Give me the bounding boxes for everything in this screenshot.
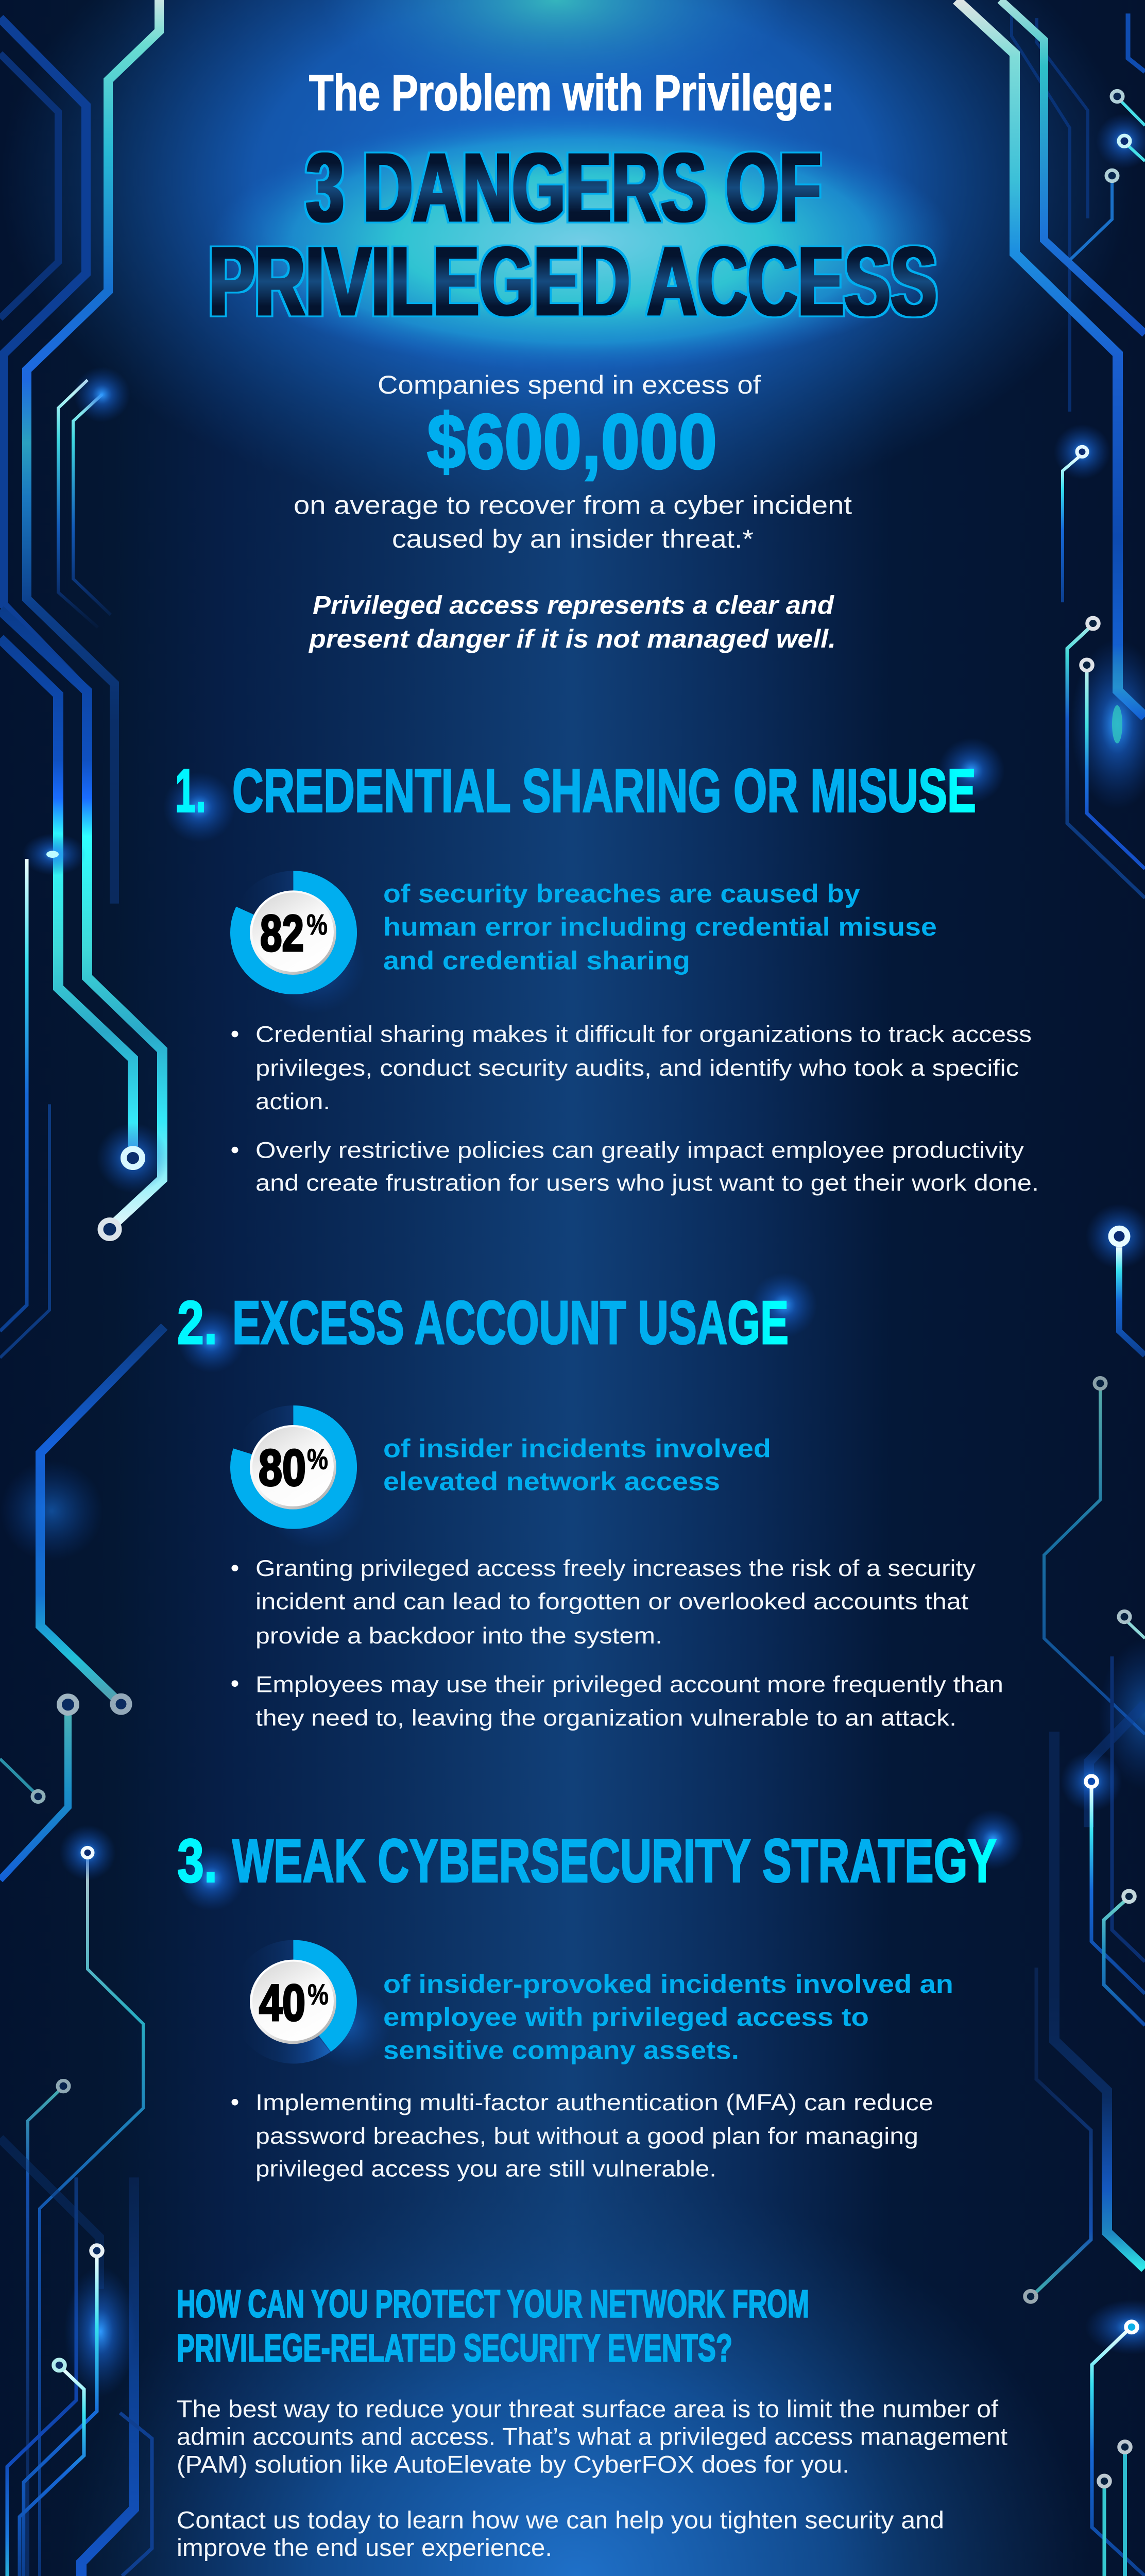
cost figure: $600,000 (427, 398, 717, 485)
closing paragraph: admin accounts and access. That’s what a privileged access management (177, 2423, 1008, 2451)
donut chart: 40%: 40 (259, 1975, 305, 2031)
section 3: weak cybersecurity strategy (177, 1809, 1024, 2181)
stat text: 40%: of insider-provoked incidents involved an (383, 1969, 953, 1998)
section 2 bullets: they need to, leaving the organization vulnerable to an attack. (255, 1705, 956, 1731)
intro text with cost figure: on average to recover from a cyber incident (294, 490, 852, 520)
intro text with cost figure: Companies spend in excess of (378, 370, 761, 399)
section 2: excess account usage (177, 1273, 1003, 1731)
stat text: 80%: elevated network access (383, 1467, 720, 1496)
closing heading: PRIVILEGE-RELATED SECURITY EVENTS? (177, 2327, 732, 2370)
section 1 heading: 1. (175, 756, 206, 825)
donut chart: 82%: 82 (260, 905, 304, 962)
call to action: Contact us today to learn how we can help you tighten security and (177, 2506, 944, 2534)
section 2 heading: 2. (177, 1289, 217, 1357)
section 1 bullets: and create frustration for users who just want to get their work done. (255, 1170, 1039, 1196)
call to action: improve the end user experience. (177, 2534, 552, 2562)
call to action (177, 2506, 944, 2562)
stat text: 80% (383, 1434, 771, 1496)
section 2 bullets: provide a backdoor into the system. (255, 1622, 662, 1649)
main headline (209, 133, 937, 336)
section 1: credential sharing or misuse (163, 738, 1039, 1196)
stat text: 80%: of insider incidents involved (383, 1434, 771, 1463)
main headline: 3 DANGERS OF (306, 133, 821, 243)
intro text with cost figure: caused by an insider threat.* (392, 524, 754, 553)
closing paragraph: (PAM) solution like AutoElevate by CyberFOX does for you. (177, 2451, 849, 2478)
section 1 bullets: Credential sharing makes it difficult for organizations to track access (255, 1021, 1032, 1047)
donut chart: 40% (241, 1950, 391, 2068)
intro text with cost figure (294, 370, 852, 553)
stat text: 82%: human error including credential misuse (383, 912, 937, 941)
donut chart: 80%: 80 (259, 1439, 306, 1497)
circuit traces: right side (956, 0, 1145, 2576)
donut chart: 40%: % (307, 1978, 329, 2011)
closing paragraph: The best way to reduce your threat surface area is to limit the number of (177, 2396, 999, 2423)
stat text: 40%: sensitive company assets. (383, 2036, 739, 2064)
section 2 bullets: Employees may use their privileged account more frequently than (255, 1671, 1003, 1697)
section 3 bullet: Implementing multi-factor authentication (MFA) can reduce (255, 2089, 933, 2115)
closing heading (177, 2282, 809, 2370)
section 3 heading (177, 1809, 1024, 1911)
donut chart: 82% (241, 881, 366, 1014)
stat text: 40%: employee with privileged access to (383, 2003, 869, 2031)
stat text: 82% (383, 879, 937, 975)
stat text: 82%: and credential sharing (383, 946, 690, 975)
donut chart: 80% (241, 1415, 366, 1549)
section 1 bullets: privileges, conduct security audits, and identify who took a specific (255, 1055, 1019, 1081)
donut chart: 82%: % (306, 909, 328, 941)
title: the problem with privilege: The Problem with Privilege: (309, 65, 834, 121)
section 1 bullets: action. (255, 1089, 330, 1114)
section 3 bullet (232, 2089, 933, 2181)
stat text: 40% (383, 1969, 953, 2064)
section 1 heading (163, 738, 1005, 842)
intro emphasis statement: Privileged access represents a clear and (313, 590, 834, 619)
section 3 bullet: privileged access you are still vulnerable. (255, 2156, 716, 2181)
section 3 bullet: password breaches, but without a good plan for managing (255, 2123, 918, 2149)
closing paragraph (177, 2396, 1008, 2478)
section 2 heading: EXCESS ACCOUNT USAGE (232, 1289, 789, 1357)
section 2 bullets (232, 1555, 1003, 1731)
section 1 bullets: Overly restrictive policies can greatly impact employee productivity (255, 1137, 1024, 1163)
section 3 heading: 3. (177, 1826, 217, 1895)
stat text: 82%: of security breaches are caused by (383, 879, 860, 908)
closing heading: HOW CAN YOU PROTECT YOUR NETWORK FROM (177, 2282, 809, 2326)
section 2 bullets: incident and can lead to forgotten or overlooked accounts that (255, 1588, 968, 1614)
section 1 bullets (232, 1021, 1039, 1196)
section 2 heading (177, 1273, 817, 1373)
intro emphasis statement: present danger if it is not managed well. (308, 624, 836, 653)
donut chart: 80%: % (307, 1443, 328, 1476)
section 2 bullets: Granting privileged access freely increases the risk of a security (255, 1555, 976, 1581)
intro emphasis statement (308, 590, 836, 653)
circuit traces: left side (0, 0, 169, 2576)
